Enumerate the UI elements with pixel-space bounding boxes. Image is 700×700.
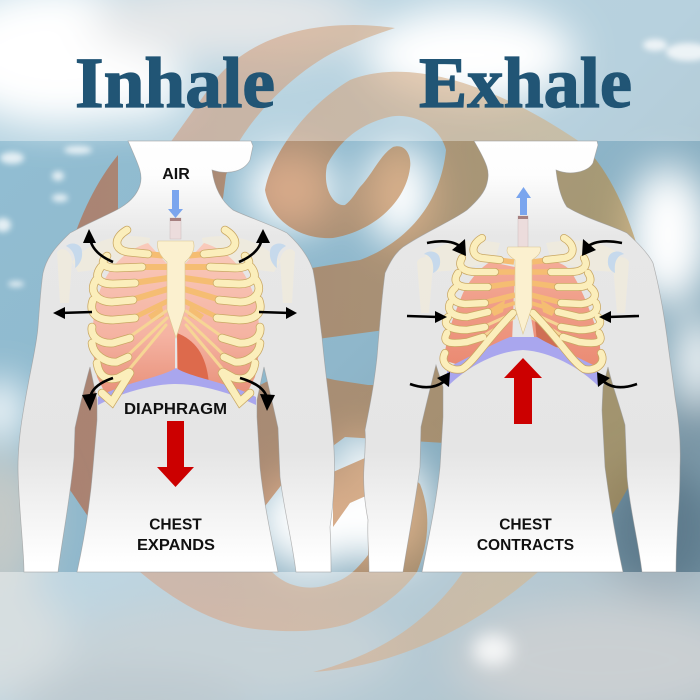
- arrow: diaphragm down: [157, 421, 194, 487]
- rib cage: [443, 238, 603, 370]
- label: chest contracts: CHEST: [499, 516, 552, 534]
- arrow: air out: [516, 187, 531, 215]
- label: diaphragm: DIAPHRAGM: [124, 401, 227, 418]
- heart: [177, 333, 209, 385]
- bottom light band: [0, 572, 700, 700]
- shoulder joints: [66, 244, 286, 268]
- body silhouette: [18, 141, 334, 572]
- windpipe: [170, 218, 181, 239]
- arrow: air in: [168, 190, 183, 218]
- arrow: diaphragm up: [504, 358, 542, 424]
- lungs: [93, 243, 259, 397]
- heart: [535, 320, 560, 348]
- diaphragm: [447, 337, 599, 387]
- swirl: upper band: [140, 25, 395, 260]
- title: Exhale: Exhale: [419, 43, 632, 123]
- arrows: ribs inward: [407, 239, 639, 387]
- shoulder bones: [57, 236, 295, 303]
- windpipe: [518, 216, 528, 247]
- label: chest contracts: CONTRACTS: [477, 537, 574, 554]
- shoulder joints: [424, 252, 624, 273]
- body silhouette: [364, 141, 680, 572]
- shoulder bones: [417, 241, 629, 313]
- swirl: middle patch: [250, 365, 445, 510]
- title: Inhale: Inhale: [75, 43, 275, 123]
- label: AIR: AIR: [162, 166, 190, 183]
- label: chest expands: EXPANDS: [137, 537, 215, 554]
- diaphragm: [98, 368, 256, 405]
- panel: exhale figure: [364, 141, 680, 572]
- swirl: outer lower coil: [53, 155, 427, 631]
- arrows: ribs outward: [53, 229, 297, 411]
- label: chest expands: CHEST: [149, 516, 202, 534]
- lungs: [443, 261, 601, 370]
- panel: inhale figure: [18, 141, 334, 572]
- top light band: [0, 0, 700, 141]
- rib cage: [92, 230, 260, 402]
- swirl: inner coil and hook: [265, 72, 660, 672]
